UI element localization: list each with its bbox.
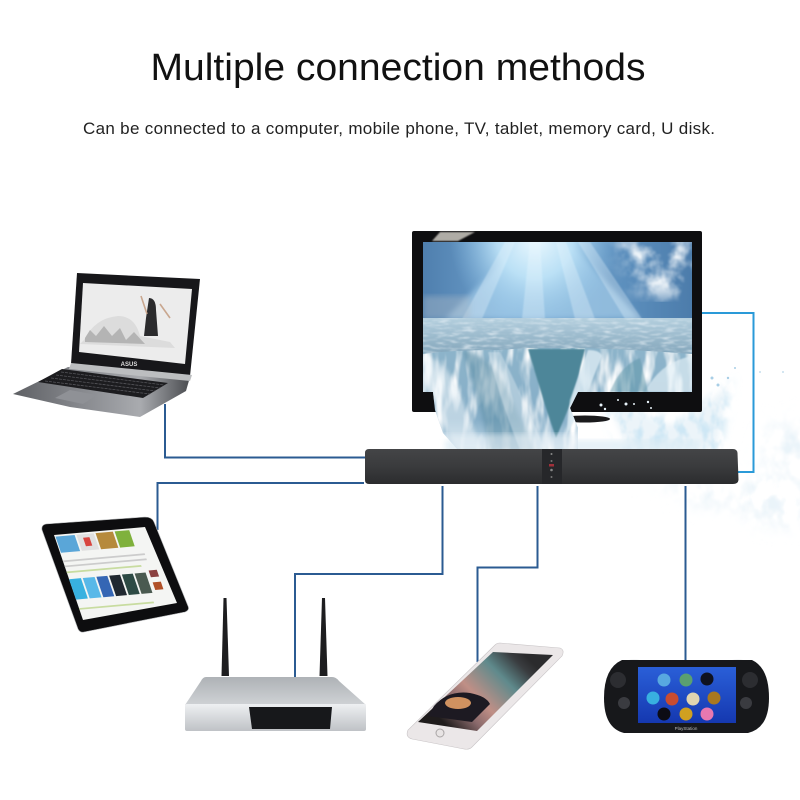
router antenna left — [222, 598, 229, 676]
soundbar — [365, 449, 738, 484]
TV stand — [560, 416, 610, 422]
waterfall — [420, 345, 695, 452]
speaker control panel — [542, 449, 562, 484]
TV glare — [432, 232, 475, 241]
phone home button — [436, 729, 444, 737]
handheld console — [604, 660, 769, 733]
console left controls — [610, 672, 630, 709]
speaker buttons — [549, 453, 554, 478]
phone — [407, 643, 563, 749]
TV frame — [412, 231, 702, 412]
phone connector — [478, 486, 538, 662]
console label: PlayStation — [675, 726, 698, 731]
router — [185, 598, 366, 731]
console body — [604, 660, 769, 733]
phone album colour — [445, 697, 471, 709]
phone album art — [428, 693, 490, 722]
router antenna right — [320, 598, 328, 676]
laptop connector — [165, 404, 366, 458]
tablet connector — [158, 483, 364, 530]
console right controls — [740, 672, 758, 709]
laptop lid — [71, 273, 200, 376]
laptop trackpad — [55, 390, 97, 404]
laptop screen — [79, 283, 192, 364]
TV — [412, 231, 702, 452]
laptop hinge — [69, 363, 192, 381]
router connector — [295, 486, 442, 678]
laptop — [13, 273, 200, 417]
router front — [185, 704, 366, 731]
TV screen sky — [423, 242, 692, 318]
speaker body — [365, 449, 738, 484]
console screen — [638, 667, 736, 723]
laptop keyboard — [38, 369, 168, 398]
router top — [185, 677, 366, 705]
tablet screen — [54, 527, 177, 620]
console app icons — [646, 672, 720, 720]
tablet — [42, 517, 189, 632]
phone body — [407, 643, 563, 749]
laptop base — [13, 367, 190, 417]
connector: TV to speaker — [702, 313, 754, 472]
console shoulder highlights — [614, 660, 758, 668]
phone screen — [418, 652, 553, 731]
console connector — [684, 486, 686, 662]
laptop brand: ASUS — [121, 362, 137, 368]
laptop wallpaper figure — [80, 296, 175, 348]
water droplets — [600, 399, 652, 410]
splash behind the speaker — [445, 367, 800, 525]
title: Multiple connection methods — [150, 47, 646, 89]
router front panel — [249, 707, 332, 729]
tablet body — [42, 517, 189, 632]
tablet apps — [55, 529, 168, 610]
subtitle: Can be connected to a computer, mobile phone, TV, tablet, memory card, U disk. — [83, 119, 715, 138]
TV screen water — [423, 318, 692, 354]
